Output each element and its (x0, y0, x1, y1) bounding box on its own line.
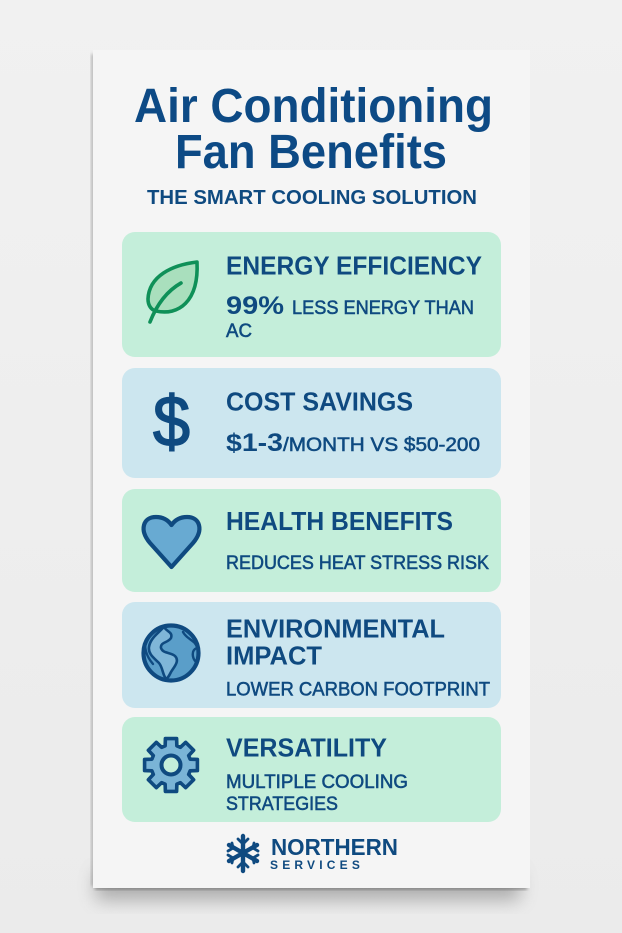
body text (226, 429, 480, 457)
body text: LOWER CARBON FOOTPRINT (226, 680, 490, 700)
card background (122, 717, 501, 822)
wordmark: NORTHERN (271, 834, 398, 860)
icon: heart (144, 517, 199, 567)
body text: 99% (226, 292, 284, 320)
body text (226, 772, 408, 815)
tagline: SERVICES (270, 858, 364, 872)
title (134, 80, 493, 179)
icon: leaf (148, 262, 197, 322)
heading: COST SAVINGS (226, 386, 413, 416)
body text: LESS ENERGY THAN (292, 298, 474, 319)
card background (122, 489, 501, 592)
heading (226, 614, 445, 670)
panel: health benefits (122, 489, 501, 592)
heading: ENVIRONMENTAL (226, 614, 445, 644)
panel: cost savings (122, 368, 501, 478)
body text: MULTIPLE COOLING (226, 772, 408, 793)
subtitle: THE SMART COOLING SOLUTION (147, 186, 477, 209)
card background (122, 232, 501, 357)
icon: globe (144, 626, 198, 680)
card background (122, 368, 501, 478)
title: Fan Benefits (175, 126, 447, 179)
body text (226, 292, 474, 342)
panel: environmental impact (122, 602, 501, 708)
card background (122, 602, 501, 708)
icon: snowflake (228, 836, 258, 871)
icon: gear (145, 739, 197, 791)
body text: $1-3 (226, 429, 283, 457)
body text: /MONTH VS $50-200 (283, 435, 480, 456)
heading: VERSATILITY (226, 732, 387, 762)
panel: versatility (122, 717, 501, 822)
logo: Northern Services (228, 834, 398, 872)
icon: dollar sign: $ (153, 383, 190, 462)
body text: STRATEGIES (226, 794, 338, 815)
heading: HEALTH BENEFITS (226, 506, 453, 536)
heading: ENERGY EFFICIENCY (226, 250, 482, 280)
heading: IMPACT (226, 640, 322, 670)
poster panel (93, 50, 530, 888)
title: Air Conditioning (134, 80, 493, 133)
body text: REDUCES HEAT STRESS RISK (226, 553, 489, 574)
body text: AC (226, 321, 252, 342)
panel: energy efficiency (122, 232, 501, 357)
